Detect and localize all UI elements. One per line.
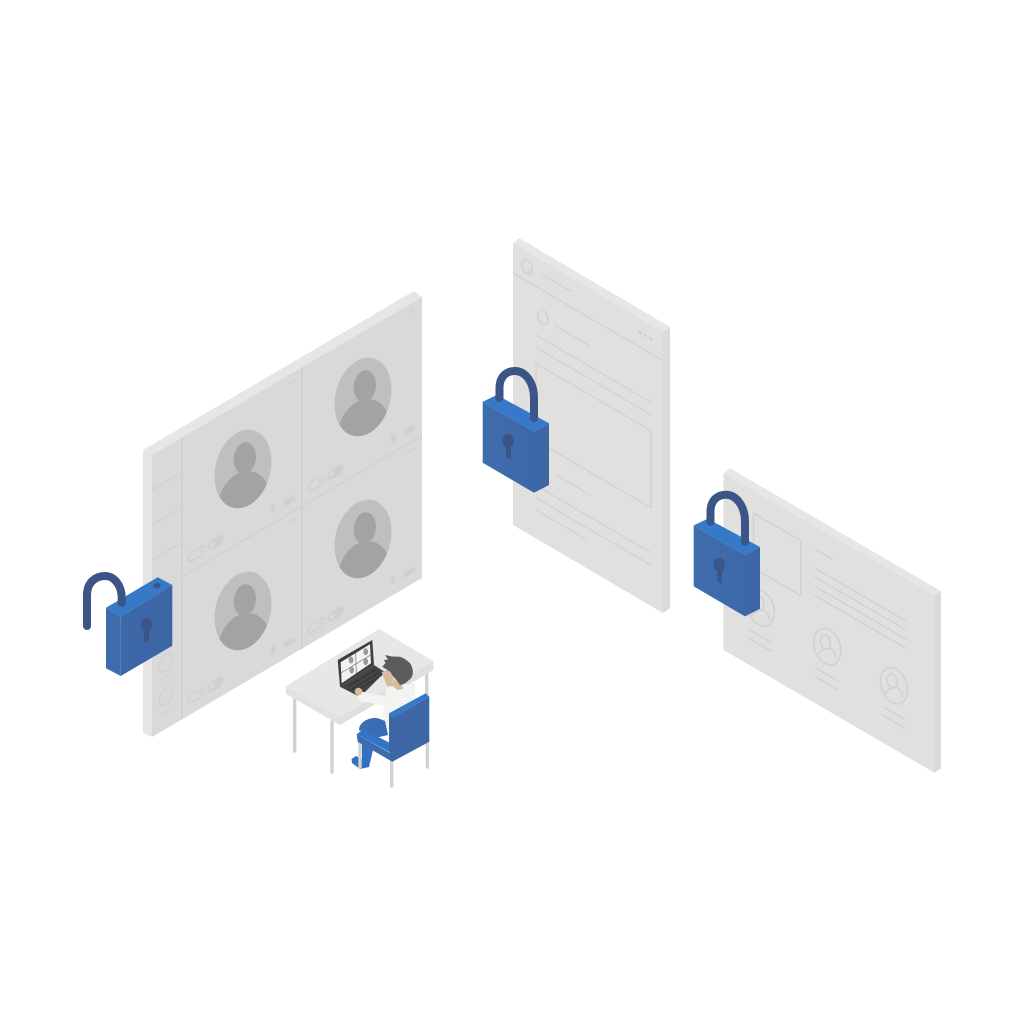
icon: open padlock — [87, 576, 172, 676]
illustration: isometric screens and padlocks — [83, 238, 941, 788]
profile avatar 1 — [749, 590, 775, 627]
panel: profile page — [724, 468, 941, 773]
trousers — [352, 718, 388, 769]
panel: article page — [513, 238, 670, 613]
video cell 1 — [188, 423, 295, 563]
panel: video call screen — [143, 291, 422, 737]
video cell 3 — [188, 565, 295, 705]
hand — [355, 688, 362, 695]
face — [382, 670, 394, 686]
person — [355, 655, 416, 735]
chair — [357, 693, 429, 786]
arm — [362, 696, 383, 700]
icon: closed padlock on profile page — [694, 495, 760, 616]
laptop — [338, 640, 385, 697]
shirt — [382, 683, 416, 735]
profile avatar 3 — [880, 667, 908, 704]
desk with laptop and seated person — [286, 629, 434, 786]
video cell 2 — [308, 351, 415, 493]
hair — [382, 655, 413, 685]
desk — [286, 629, 434, 772]
profile avatar 2 — [813, 628, 842, 666]
icon: closed padlock on article page — [483, 371, 549, 493]
video cell 4 — [308, 493, 415, 635]
neck — [394, 679, 403, 690]
